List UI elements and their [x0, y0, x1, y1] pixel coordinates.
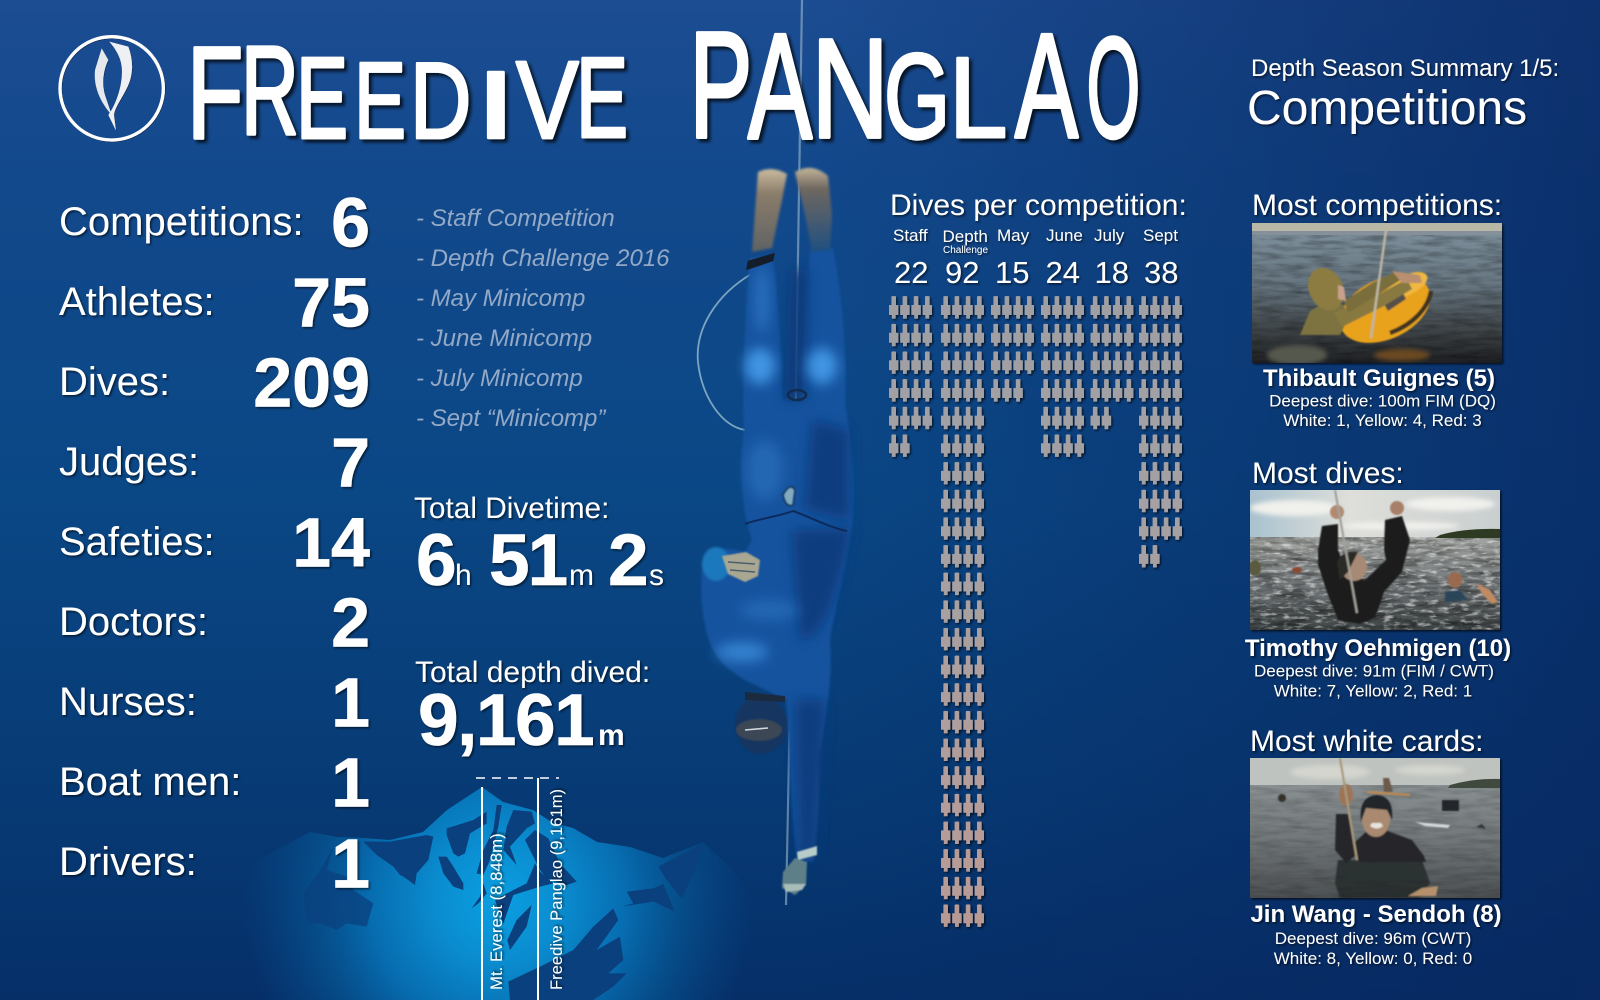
icon: Freedive Panglao logo — [60, 37, 163, 140]
heading: Most competitions: — [1252, 189, 1502, 222]
Depth Challenge column: 92 dives — [941, 296, 984, 927]
title: FREEDIVE PANGLAO: O — [1086, 7, 1140, 168]
total divetime: 51 — [489, 520, 567, 601]
July column: 18 dives — [1090, 296, 1134, 429]
mountain silhouette — [205, 787, 775, 1000]
float — [1341, 278, 1430, 344]
heading: season summary — [1247, 55, 1559, 135]
title: FREEDIVE PANGLAO: A — [748, 2, 812, 170]
label: Freedive Panglao: Freedive Panglao (9,161m) — [547, 789, 566, 990]
title: FREEDIVE PANGLAO: E — [296, 32, 348, 163]
stat numbers: 14 — [292, 504, 370, 582]
title: FREEDIVE PANGLAO: P — [690, 0, 752, 169]
total divetime: 6 — [416, 520, 457, 601]
title: FREEDIVE PANGLAO: V — [516, 38, 579, 162]
total divetime: m — [569, 559, 594, 592]
stat numbers — [253, 184, 370, 902]
total depth dived: m — [598, 719, 625, 752]
column totals: 92 — [945, 255, 979, 290]
athlete details — [1269, 392, 1496, 430]
title: FREEDIVE PANGLAO: G — [884, 29, 950, 165]
dark side shading — [784, 270, 852, 860]
stat labels: Dives: — [59, 360, 170, 404]
athlete name: Jin Wang - Sendoh (8) — [1250, 901, 1502, 928]
panel: headline stats — [59, 184, 370, 902]
column labels: Challenge — [943, 245, 988, 256]
chart: dives per competition — [889, 189, 1187, 927]
athlete details: Deepest dive: 100m FIM (DQ) — [1269, 392, 1496, 410]
column totals — [894, 255, 1178, 290]
title: FREEDIVE PANGLAO: R — [241, 20, 299, 161]
diver — [1335, 814, 1426, 863]
athlete name: Timothy Oehmigen (10) — [1245, 635, 1511, 662]
title: FREEDIVE PANGLAO: L — [949, 35, 1007, 162]
total depth dived: 9,161 — [418, 680, 593, 761]
column totals: 15 — [995, 255, 1029, 290]
boat and others — [1367, 791, 1410, 796]
lanyard ring and weight — [788, 390, 806, 400]
column totals: 22 — [894, 255, 928, 290]
stat labels — [59, 200, 304, 884]
total depth dived: Total depth dived: — [415, 656, 650, 689]
chart heading: Dives per competition: — [890, 189, 1187, 222]
column labels: Staff — [893, 226, 928, 245]
safety lanyard cord — [698, 273, 753, 430]
waist line — [745, 511, 847, 531]
total divetime: h — [455, 559, 472, 592]
column labels: Sept — [1143, 226, 1178, 245]
heading: Most dives: — [1252, 457, 1404, 490]
head and mask — [735, 692, 787, 754]
competition list: - July Minicomp — [416, 365, 583, 392]
athlete details: White: 7, Yellow: 2, Red: 1 — [1274, 682, 1472, 700]
stat numbers: 7 — [331, 424, 370, 502]
stat labels: Nurses: — [59, 680, 197, 724]
athlete details: Deepest dive: 91m (FIM / CWT) — [1254, 662, 1494, 680]
diver silhouette — [1318, 516, 1410, 624]
athlete details: White: 1, Yellow: 4, Red: 3 — [1283, 411, 1482, 430]
dive rope — [786, 0, 802, 905]
bottom hand with neck weight — [782, 846, 817, 895]
stat numbers: 6 — [331, 184, 370, 262]
knee highlights — [716, 266, 837, 662]
panel: most white cards — [1250, 725, 1502, 968]
title: FREEDIVE PANGLAO — [187, 0, 1140, 170]
glove cuff — [702, 547, 730, 581]
stat numbers: 75 — [292, 264, 370, 342]
stat labels: Doctors: — [59, 600, 208, 644]
diver — [1300, 303, 1348, 335]
column totals: 38 — [1144, 255, 1178, 290]
ankle strap — [748, 255, 773, 268]
title: FREEDIVE PANGLAO: E — [354, 40, 406, 162]
competition list — [416, 205, 670, 432]
athlete name: Thibault Guignes (5) — [1263, 365, 1495, 392]
title: FREEDIVE PANGLAO: F — [187, 20, 243, 166]
stat labels: Boat men: — [59, 760, 241, 804]
competition list: - Depth Challenge 2016 — [416, 245, 670, 272]
rope — [1340, 758, 1357, 860]
competition list: - Staff Competition — [416, 205, 615, 232]
Staff column: 22 dives — [889, 296, 932, 457]
stat numbers: 2 — [331, 584, 370, 662]
dashed top line — [476, 777, 559, 779]
other hands — [1448, 572, 1462, 588]
title: FREEDIVE PANGLAO: N — [812, 10, 889, 167]
panel: most dives — [1245, 457, 1511, 700]
column labels — [893, 226, 1178, 256]
competition list: - Sept “Minicomp” — [416, 405, 606, 432]
stat labels: Drivers: — [59, 840, 197, 884]
column labels: July — [1094, 226, 1125, 245]
column labels: June — [1046, 226, 1083, 245]
rope — [1371, 223, 1387, 338]
stat numbers: 209 — [253, 344, 370, 422]
total divetime: Total Divetime: — [414, 492, 609, 525]
May column: 15 dives — [991, 296, 1034, 402]
diver body — [701, 248, 854, 862]
stat labels: Athletes: — [59, 280, 215, 324]
feet — [752, 168, 832, 252]
heading: Most white cards: — [1250, 725, 1483, 758]
Everest height bar — [481, 787, 483, 1000]
label: Mt. Everest: Mt. Everest (8,848m) — [487, 833, 506, 990]
athlete details: White: 8, Yellow: 0, Red: 0 — [1274, 949, 1472, 968]
photo: Thibault on yellow float — [1252, 223, 1502, 365]
athlete details: Deepest dive: 96m (CWT) — [1275, 929, 1471, 948]
total divetime: s — [649, 559, 664, 592]
title: FREEDIVE PANGLAO: E — [576, 33, 628, 162]
mountain graphic: Everest vs Panglao — [205, 778, 775, 1000]
stat labels: Competitions: — [59, 200, 304, 244]
stat numbers: 1 — [331, 744, 370, 822]
total divetime — [414, 492, 664, 601]
stat numbers: 1 — [331, 824, 370, 902]
total divetime: 2 — [608, 520, 649, 601]
Panglao depth bar — [537, 778, 539, 1000]
column labels: May — [997, 226, 1030, 245]
total depth dived — [415, 656, 650, 761]
title: FREEDIVE PANGLAO: D — [410, 40, 471, 161]
column labels: Depth — [942, 227, 988, 246]
title: FREEDIVE PANGLAO: I — [475, 51, 517, 159]
stat labels: Judges: — [59, 440, 199, 484]
competition list: - May Minicomp — [416, 285, 585, 312]
column totals: 18 — [1094, 255, 1129, 290]
competition list: - June Minicomp — [416, 325, 592, 352]
photo: Jin Wang in water — [1250, 758, 1500, 898]
title: FREEDIVE PANGLAO: A — [1015, 3, 1078, 169]
athlete details — [1254, 662, 1494, 700]
athlete details — [1274, 929, 1472, 968]
heading: season summary: Depth Season Summary 1/5: — [1251, 55, 1559, 82]
panel: most competitions — [1252, 189, 1502, 430]
photo: Timothy raising arms — [1249, 490, 1500, 630]
diver photo illustration — [698, 168, 854, 895]
mountain dark patches — [303, 805, 703, 1000]
heading: season summary: Competitions — [1247, 82, 1527, 135]
rope — [1335, 490, 1357, 613]
Sept column: 38 dives — [1139, 296, 1182, 568]
stat numbers: 1 — [331, 664, 370, 742]
hand — [722, 552, 760, 582]
June column: 24 dives — [1041, 296, 1084, 457]
stat labels: Safeties: — [59, 520, 215, 564]
column totals: 24 — [1046, 255, 1080, 290]
